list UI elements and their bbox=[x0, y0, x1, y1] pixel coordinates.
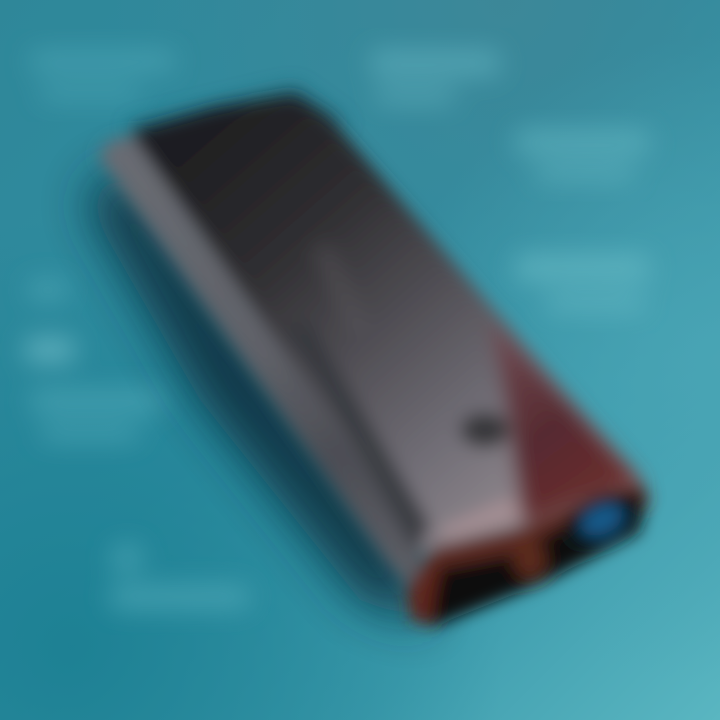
blurred label: top left bbox=[30, 50, 175, 101]
power bank bbox=[98, 95, 654, 628]
end cap middle brown section bbox=[513, 540, 547, 580]
seam shadow bbox=[285, 325, 430, 552]
surface sheen bbox=[310, 245, 370, 335]
blurred label: middle left bbox=[25, 280, 165, 441]
port: blue bbox=[576, 498, 628, 542]
logo mark bbox=[461, 413, 509, 447]
blurred label: bottom left bbox=[110, 545, 250, 609]
end cap lower dark band bbox=[430, 490, 642, 628]
blurred label: middle right bbox=[515, 255, 650, 311]
red corner panel bbox=[490, 318, 642, 526]
end cap orange corner bbox=[406, 555, 440, 624]
end cap bbox=[408, 482, 650, 625]
side edge bbox=[98, 135, 425, 590]
drop shadow bbox=[85, 85, 425, 625]
pink lower edge glow bbox=[440, 498, 525, 540]
top face bbox=[130, 95, 642, 552]
dark end section bbox=[552, 480, 654, 564]
blurred label: top centre bbox=[370, 50, 500, 104]
blurred label: upper right bbox=[515, 130, 650, 181]
